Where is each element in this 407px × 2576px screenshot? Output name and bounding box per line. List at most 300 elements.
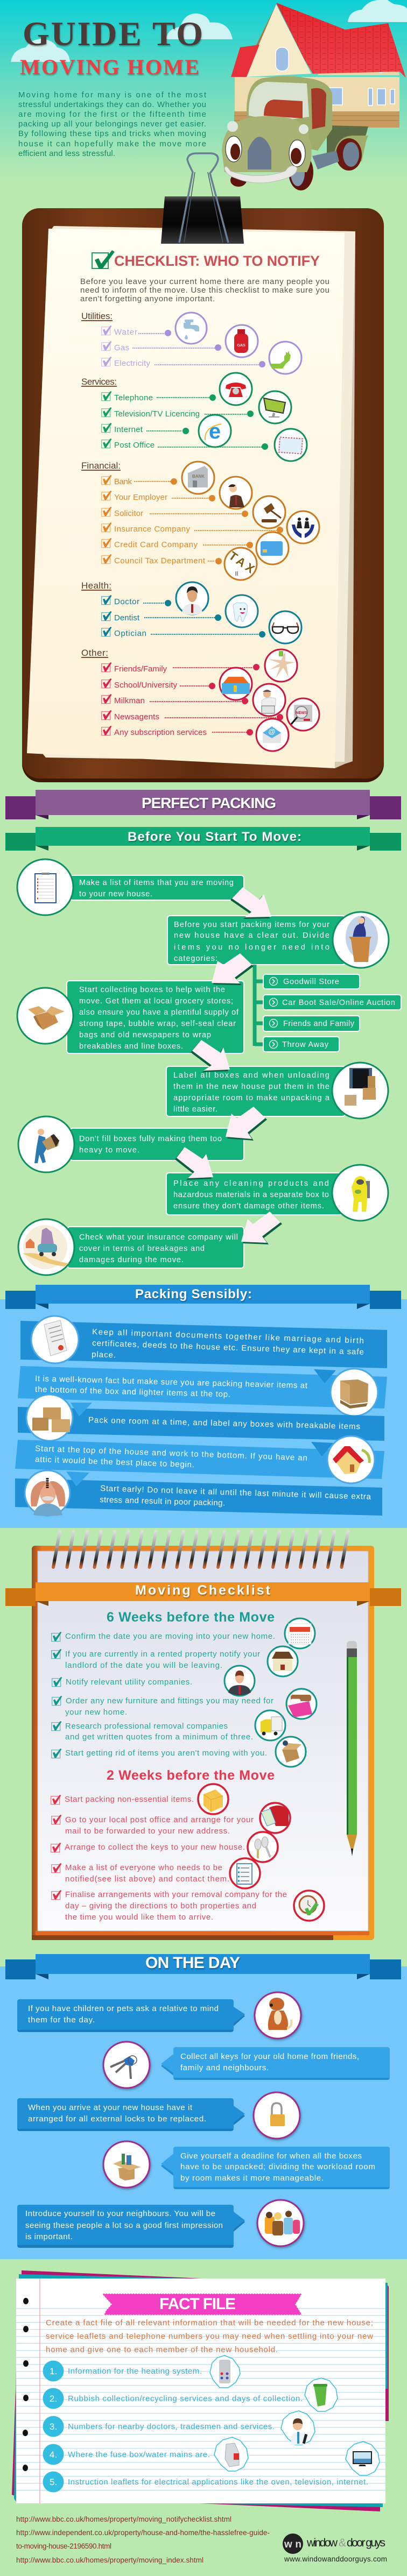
icon: gas bottle	[226, 325, 258, 357]
item: electricity: Electricity	[114, 359, 151, 368]
option: friends and family	[263, 1016, 360, 1031]
fact 3: doctors: 3.	[50, 2422, 57, 2432]
packing tip 1: documents: Keep all important documents together like marriage and birth	[92, 1327, 364, 1346]
step 3: collect boxes: also ensure you have a plentiful supply of	[79, 1008, 239, 1017]
intro paragraph: Moving home for many is one of the most	[18, 90, 207, 100]
icon: gavel	[253, 496, 285, 528]
banner: packing sensibly: Packing Sensibly:	[135, 1287, 252, 1301]
item: dentist	[102, 611, 221, 622]
icon: dog	[255, 1992, 301, 2039]
step 5: do not overfill: heavy to move.	[79, 1146, 139, 1155]
option: throw away: Throw Away	[282, 1041, 329, 1049]
arrows between steps	[175, 887, 282, 1244]
tip 4: unpacking deadline: Give yourself a deadline for when all the boxes	[180, 2152, 362, 2161]
intro paragraph: efficient and less stressful.	[18, 149, 115, 158]
icon: checklist	[230, 1858, 260, 1888]
section: other	[81, 648, 319, 751]
step 6: hazardous materials: hazardous materials in a separate box to	[173, 1191, 329, 1199]
item: doctor: Doctor	[114, 597, 139, 606]
sub-list: categories for items	[255, 965, 401, 1052]
heading: 6 weeks: 6 Weeks before the Move	[107, 1610, 275, 1625]
item: bank	[102, 475, 177, 486]
icon: open box	[17, 988, 73, 1044]
illustration: house on a truck	[222, 3, 406, 190]
section: health	[81, 581, 301, 643]
intro paragraph: stressful undertakings they can do. Whether you	[18, 100, 206, 109]
packing tip 2: heavier items: It is a well-known fact but make sure you are packing heavier items at	[35, 1374, 308, 1390]
packing tip 4: top to bottom	[15, 1436, 384, 1483]
item: finalise arrangements: the time you would like them to arrive.	[65, 1913, 213, 1922]
item: rented property	[52, 1649, 260, 1670]
item: solicitor: Solicitor	[114, 509, 143, 518]
icon: browser e	[199, 415, 231, 447]
step 7: check insurance: damages during the move.	[79, 1256, 184, 1264]
item: internet: Internet	[114, 425, 143, 434]
icon: envelope	[256, 719, 289, 751]
item: finalise arrangements	[52, 1890, 287, 1922]
logo: window and door guys: wn	[284, 2539, 301, 2550]
paper sheets	[335, 231, 355, 768]
icon: pallet of boxes	[331, 1369, 378, 1416]
item: get rid of items: Start getting rid of items you aren't moving with you.	[65, 1749, 267, 1758]
intro paragraph	[18, 90, 207, 158]
step 1: make a list: to your new house.	[79, 890, 152, 898]
heading: 2 weeks: 2 Weeks before the Move	[107, 1768, 275, 1783]
title: MOVING HOME	[20, 55, 199, 79]
fact 4: fuse box: Where the fuse box/water mains are.	[68, 2450, 210, 2459]
step 3: collect boxes: strong tape, bubble wrap, self-seal clear	[79, 1020, 236, 1028]
icon: removal truck	[255, 1710, 285, 1740]
item: solicitor	[102, 507, 248, 518]
heading: utilities: Utilities:	[81, 311, 113, 321]
intro paragraph: By following these tips and tricks when moving	[18, 129, 206, 138]
icon: glasses	[269, 611, 301, 643]
checklist intro text: aren't forgetting anyone important.	[80, 294, 215, 303]
item: optician: Optician	[114, 629, 146, 638]
item: milkman	[102, 694, 248, 705]
item: internet	[102, 423, 189, 434]
hood	[222, 116, 312, 172]
fact 3: doctors: Numbers for nearby doctors, tradesmen and services.	[68, 2422, 275, 2431]
banner: on the day	[5, 1954, 401, 1979]
icon: box of items	[276, 1737, 306, 1767]
item: employer: Your Employer	[114, 493, 167, 502]
packing tip 2: heavier items	[18, 1366, 387, 1416]
banner: before you start to move	[5, 827, 401, 851]
source links	[16, 2515, 270, 2564]
step 4: label boxes: little easier.	[173, 1105, 217, 1114]
heading: financial: Financial:	[81, 461, 121, 471]
banner: on the day: ON THE DAY	[145, 1954, 240, 1972]
fact 1: heating: 1.	[50, 2366, 57, 2376]
fact 1: heating: Information for the heating system.	[68, 2367, 202, 2376]
icon: auction podium	[333, 912, 389, 968]
icon: calendar	[285, 1618, 315, 1648]
item: collect keys: Arrange to collect the keys to your new house.	[65, 1843, 245, 1852]
source links: to-moving-house-2196590.html	[16, 2542, 111, 2550]
packing tip 3: one room at a time: Pack one room at a time, and label any boxes with breakable items	[88, 1416, 360, 1431]
option: goodwill store: Goodwill Store	[283, 978, 339, 986]
fact file intro: service leaflets and telephone numbers you may need when settling into your new	[46, 2332, 373, 2341]
source links: http://www.bbc.co.uk/homes/property/moving_notifychecklist.shtml	[16, 2515, 231, 2523]
grille	[248, 137, 271, 169]
tip 4: unpacking deadline: have to be unpacked; dividing the workload room	[180, 2162, 375, 2171]
tip 2: collect keys: Collect all keys for your old home from friends,	[180, 2052, 359, 2061]
section: utilities	[81, 311, 301, 374]
fact file notebook sheet	[12, 2270, 389, 2511]
item: bank: Bank	[114, 477, 132, 486]
notebook: moving checklist	[32, 1532, 374, 1940]
icon: credit card	[256, 532, 289, 564]
checklist intro text: Before you leave your current home there are many people you	[80, 277, 329, 286]
fact 2: rubbish: 2.	[50, 2394, 57, 2404]
source links: http://www.bbc.co.uk/homes/property/moving_index.shtml	[16, 2556, 204, 2564]
item: doctor	[102, 595, 171, 606]
step 5: do not overfill: Don't fill boxes fully making them too	[79, 1135, 222, 1143]
item: television	[102, 407, 254, 419]
arrow: step 6 to 7	[241, 1212, 282, 1244]
intro paragraph: packing up all your belongings never get easier.	[18, 119, 206, 129]
item: television: Television/TV Licencing	[114, 409, 200, 419]
option: friends and family: Friends and Family	[283, 1020, 355, 1028]
icon: envelope: @	[269, 727, 275, 735]
step 6: hazardous materials	[166, 1165, 388, 1221]
packing tip 5: start early	[15, 1470, 382, 1516]
step 5: do not overfill	[18, 1116, 244, 1172]
arrow: step 4 to 5	[226, 1107, 267, 1141]
fact 4: fuse box	[43, 2437, 248, 2471]
icon: man carrying box	[18, 1116, 74, 1172]
step 6: hazardous materials: Place any cleaning products and	[173, 1179, 329, 1188]
step 7: check insurance	[18, 1219, 244, 1275]
icon: stressed man	[25, 1470, 70, 1516]
item: optician	[102, 627, 265, 638]
item: milkman: Milkman	[114, 696, 145, 705]
checklist: 6 weeks before the move	[52, 1610, 317, 1767]
packing tip 3: one room at a time	[18, 1395, 384, 1441]
icon: tap	[176, 313, 207, 344]
pencil	[347, 1641, 357, 1856]
arrow: step 1 to 2	[230, 887, 271, 919]
eyes	[226, 136, 305, 167]
icon: bank: BANK	[192, 474, 205, 479]
arrow: step 3 to 4	[191, 1040, 230, 1072]
logo: window and door guys	[283, 2533, 387, 2563]
item: insurance	[102, 522, 283, 534]
option: car boot sale: Car Boot Sale/Online Auction	[282, 999, 395, 1007]
banner: moving checklist: Moving Checklist	[135, 1583, 271, 1598]
icon: bed	[286, 1689, 317, 1719]
cab	[247, 76, 332, 151]
step 4: label boxes	[166, 1063, 388, 1119]
step 4: label boxes: them in the new house put them in the	[173, 1082, 329, 1091]
fact 5: instruction leaflets: 5.	[50, 2477, 57, 2487]
item: employer	[102, 491, 215, 502]
item: post office: Post Office	[114, 441, 155, 450]
logo: window and door guys: window	[306, 2537, 338, 2549]
icon: family in hands	[287, 511, 319, 543]
binder clip	[161, 153, 244, 244]
step 2: clear out: categories:	[174, 954, 217, 963]
packing tip 1: documents: place.	[92, 1350, 116, 1360]
step 3: collect boxes	[17, 981, 244, 1053]
item: removal companies: and get written quotes from a minimum of three.	[65, 1732, 253, 1742]
option: goodwill store	[263, 974, 360, 989]
item: start packing: Start packing non-essential items.	[65, 1795, 194, 1804]
banner: moving checklist	[5, 1582, 401, 1606]
tip 5: neighbours	[17, 2200, 304, 2248]
icon: hazmat suit	[332, 1165, 388, 1221]
spiral binding	[53, 1532, 348, 1567]
step 6: hazardous materials: ensure they don't damage other items.	[173, 1202, 324, 1211]
packing tip 5: start early: Start early! Do not leave it all until the last minute it will cause extra	[100, 1484, 371, 1502]
item: post office: mail to be forwarded to your new address.	[65, 1827, 230, 1836]
fact 2: rubbish: Rubbish collection/recycling services and days of collection.	[68, 2394, 303, 2403]
icon: telephone	[220, 373, 252, 405]
packing tip 1: documents: certificates, deeds to the house etc. Ensure they are kept in a safe	[92, 1339, 364, 1357]
back sheets	[22, 2270, 202, 2278]
item: water: Water	[114, 328, 137, 337]
step 2: clear out	[167, 912, 389, 968]
item: rented property: landlord of the date you will be leaving.	[65, 1661, 222, 1670]
connector	[255, 965, 263, 1046]
section: financial	[81, 461, 319, 580]
step 2: clear out: items you no longer need into	[174, 943, 329, 952]
item: newsagents	[102, 710, 283, 721]
fact file intro: home and give one to each member of the new household.	[46, 2345, 278, 2354]
item: telephone: Telephone	[114, 393, 153, 402]
item: friends: Friends/Family	[114, 664, 167, 674]
banner: perfect packing: PERFECT PACKING	[142, 795, 276, 811]
step 4: label boxes: appropriate room to make unpacking a	[173, 1094, 330, 1102]
item: gas	[102, 341, 221, 352]
icon: businessman	[224, 1666, 255, 1696]
step 1: make a list	[17, 859, 244, 915]
item: council tax: Council Tax Department	[114, 556, 206, 565]
heading: services: Services:	[81, 377, 117, 387]
icon: certificate	[31, 1316, 79, 1363]
heading: checklist who to notify: CHECKLIST: WHO TO NOTIFY	[114, 253, 320, 269]
icon: green plug	[269, 342, 301, 374]
logo: window and door guys: www.windowanddoorguys.com	[284, 2555, 387, 2563]
fact 5: instruction leaflets	[43, 2441, 380, 2492]
icon: recycling box	[103, 2141, 150, 2188]
intro paragraph: are moving for the first or the fifteenth time	[18, 110, 206, 119]
tip 5: neighbours: seeing these people a lot so a good first impression	[25, 2221, 223, 2230]
banner: perfect packing	[5, 790, 401, 819]
fact 5: instruction leaflets: Instruction leaflets for electrical applications like the oven, television, internet.	[68, 2478, 368, 2487]
icon: bank	[182, 462, 214, 494]
brick base	[234, 111, 399, 128]
option: car boot sale	[263, 995, 401, 1010]
icon: neighbours	[257, 2200, 304, 2246]
item: newsagents: Newsagents	[114, 712, 159, 721]
title	[20, 15, 203, 79]
icon: news: NEWS	[296, 711, 307, 715]
tip 5: neighbours: Introduce yourself to your neighbours. You will be	[25, 2209, 215, 2218]
item: water	[102, 325, 171, 337]
section: services	[81, 373, 307, 461]
item: removal companies: Research professional removal companies	[65, 1722, 228, 1731]
item: post office	[52, 1815, 254, 1836]
title: GUIDE TO	[23, 15, 203, 53]
step 3: collect boxes: move. Get them at local grocery stores;	[79, 997, 233, 1006]
icon: overloaded car	[18, 1219, 74, 1275]
tip 3: replace locks	[17, 2092, 300, 2139]
icon: parcel	[198, 1784, 228, 1814]
item: school: School/University	[114, 681, 178, 690]
fact file intro: Create a fact file of all relevant information that will be needed for the new house;	[46, 2318, 373, 2327]
item: order furniture: Order any new furniture and fittings you may need for	[66, 1696, 273, 1705]
tip 1: children or pets: If you have children or pets ask a relative to mind	[28, 2004, 219, 2013]
item: telephone	[102, 391, 216, 402]
icon: tooth	[226, 595, 258, 627]
item: order furniture: your new home.	[65, 1708, 127, 1717]
step 3: collect boxes: Start collecting boxes to help with the	[79, 986, 225, 994]
fact 4: fuse box: 4.	[50, 2450, 57, 2460]
item: dentist: Dentist	[114, 613, 140, 622]
icon: news	[287, 698, 319, 731]
front wheels	[289, 154, 313, 190]
source links: http://www.independent.co.uk/property/house-and-home/the-hasslefree-guide-	[16, 2529, 270, 2537]
icon: house	[268, 1646, 298, 1676]
checklist intro text: need to inform of the move. Use this checklist to make sure you	[80, 286, 329, 295]
icon: key bunch	[103, 2042, 150, 2088]
checklist: 2 weeks before the move	[51, 1768, 324, 1922]
logo: window and door guys: door guys	[347, 2537, 385, 2549]
item: credit card	[102, 538, 253, 549]
item: confirm date: Confirm the date you are moving into your new home.	[65, 1632, 275, 1641]
item: list everyone	[52, 1863, 229, 1884]
icon: house keys	[248, 1832, 278, 1862]
icon: employer	[220, 477, 252, 509]
fact 3: doctors	[43, 2411, 315, 2445]
icon: wheelie bin	[305, 2378, 338, 2411]
item: post office: Go to your local post office and arrange for your	[65, 1815, 254, 1824]
tip 5: neighbours: is important.	[25, 2232, 73, 2241]
packing tip 4: top to bottom: attic it would be the best place to begin.	[35, 1455, 194, 1469]
tip 4: unpacking deadline	[103, 2141, 390, 2189]
item: credit card: Credit Card Company	[114, 540, 198, 549]
step 4: label boxes: Label all boxes and when unloading	[173, 1071, 329, 1080]
item: post office	[102, 438, 268, 450]
step 2: clear out: Before you start packing items for your	[174, 921, 329, 929]
icon: mailbox	[260, 1803, 290, 1833]
icon: padlock	[254, 2092, 300, 2139]
icon: postcard	[275, 429, 307, 461]
item: utility companies: Notify relevant utility companies.	[66, 1678, 192, 1687]
icon: circuit breaker	[214, 2437, 248, 2471]
icon: boxes at container door	[332, 1063, 388, 1119]
item: finalise arrangements: day – giving the directions to both properties and	[65, 1901, 256, 1910]
item: subscriptions: Any subscription services	[114, 728, 207, 737]
icon: television	[346, 2441, 380, 2475]
item: friends	[102, 662, 259, 674]
house body	[235, 77, 399, 112]
step 7: check insurance: Check what your insurance company will	[79, 1233, 238, 1242]
fact 1: heating	[43, 2355, 240, 2388]
windows	[276, 47, 395, 105]
packing tip 2: heavier items: the bottom of the box and lighter items at the top.	[35, 1385, 230, 1399]
step 3: collect boxes: bags and old newspapers to wrap	[79, 1031, 211, 1039]
icon: monitor	[259, 391, 291, 423]
step 2: clear out: new house have a clear out. Divide	[174, 931, 329, 940]
step 1: make a list: Make a list of items that you are moving	[79, 879, 234, 887]
tip 3: replace locks: When you arrive at your new house have it	[28, 2103, 193, 2112]
bumper	[224, 166, 297, 183]
item: rented property: If you are currently in a rented property notify your	[65, 1650, 260, 1659]
packing tip 5: start early: stress and result in poor packing.	[100, 1495, 225, 1508]
item: gas: Gas	[114, 343, 129, 352]
item: council tax	[102, 554, 222, 565]
clouds	[11, 0, 407, 62]
intro paragraph: house it can hopefully make the move more	[18, 139, 206, 148]
punched holes	[23, 2298, 29, 2471]
step 3: collect boxes: breakables and line boxes.	[79, 1042, 183, 1051]
logo: window and door guys: &	[339, 2537, 346, 2549]
clipboard	[22, 208, 384, 782]
fact file intro	[46, 2318, 373, 2354]
item: insurance: Insurance Company	[114, 525, 191, 534]
item: finalise arrangements: Finalise arrangements with your removal company for the	[65, 1890, 287, 1899]
tip 1: children or pets: them for the day.	[28, 2015, 95, 2025]
tip 2: collect keys	[103, 2042, 390, 2088]
banner: before you start to move: Before You Start To Move:	[128, 830, 301, 844]
ruled paper	[16, 2278, 385, 2503]
icon: thermostat remote	[210, 2355, 240, 2388]
icon: milkman	[253, 684, 285, 716]
ribbon: fact file	[102, 2294, 302, 2315]
ribbon: fact file: FACT FILE	[159, 2295, 236, 2313]
packing tip 1: documents	[20, 1316, 387, 1368]
arrow: step 5 to 6	[175, 1147, 213, 1180]
icon: browser e: e	[209, 420, 221, 443]
icon: cardboard boxes	[26, 1395, 73, 1441]
item: electricity	[102, 357, 265, 368]
fact 2: rubbish	[43, 2378, 338, 2411]
packing tip 4: top to bottom: Start at the top of the house and work to the bottom. If you have an	[35, 1444, 307, 1463]
banner: packing sensibly	[5, 1285, 401, 1309]
item: subscriptions	[102, 726, 253, 737]
heading: health: Health:	[81, 581, 111, 591]
red roof	[276, 3, 406, 78]
tip 2: collect keys: family and neighbours.	[180, 2063, 269, 2072]
icon: doctor with clipboard	[281, 2411, 315, 2445]
icon: gas bottle: GAS	[237, 344, 245, 348]
tip 1: children or pets	[17, 1992, 301, 2039]
heading: other: Other:	[81, 648, 108, 658]
icon: house with arrow	[327, 1436, 375, 1483]
icon: clipboard	[17, 859, 73, 915]
option: throw away	[263, 1037, 339, 1052]
item: list everyone: Make a list of everyone who needs to be	[65, 1863, 222, 1872]
icon: stacked hands	[265, 649, 297, 682]
icon: clock with tick	[294, 1891, 324, 1921]
item: school	[102, 678, 215, 690]
checklist intro text	[80, 277, 329, 303]
icon: school	[220, 668, 252, 700]
item: order furniture	[52, 1696, 273, 1717]
item: removal companies	[52, 1721, 253, 1742]
icon: doctor	[176, 582, 208, 615]
item: list everyone: notified(see list above) and contact them.	[65, 1874, 229, 1884]
truck back	[327, 125, 368, 156]
step 7: check insurance: cover in terms of breakages and	[79, 1244, 205, 1253]
tip 3: replace locks: arranged for all external locks to be replaced.	[28, 2114, 206, 2124]
arrow: step 2 to 3	[212, 953, 254, 985]
icon: tax: TAX	[227, 549, 257, 576]
tip 4: unpacking deadline: by room makes it more manageable.	[180, 2174, 324, 2183]
